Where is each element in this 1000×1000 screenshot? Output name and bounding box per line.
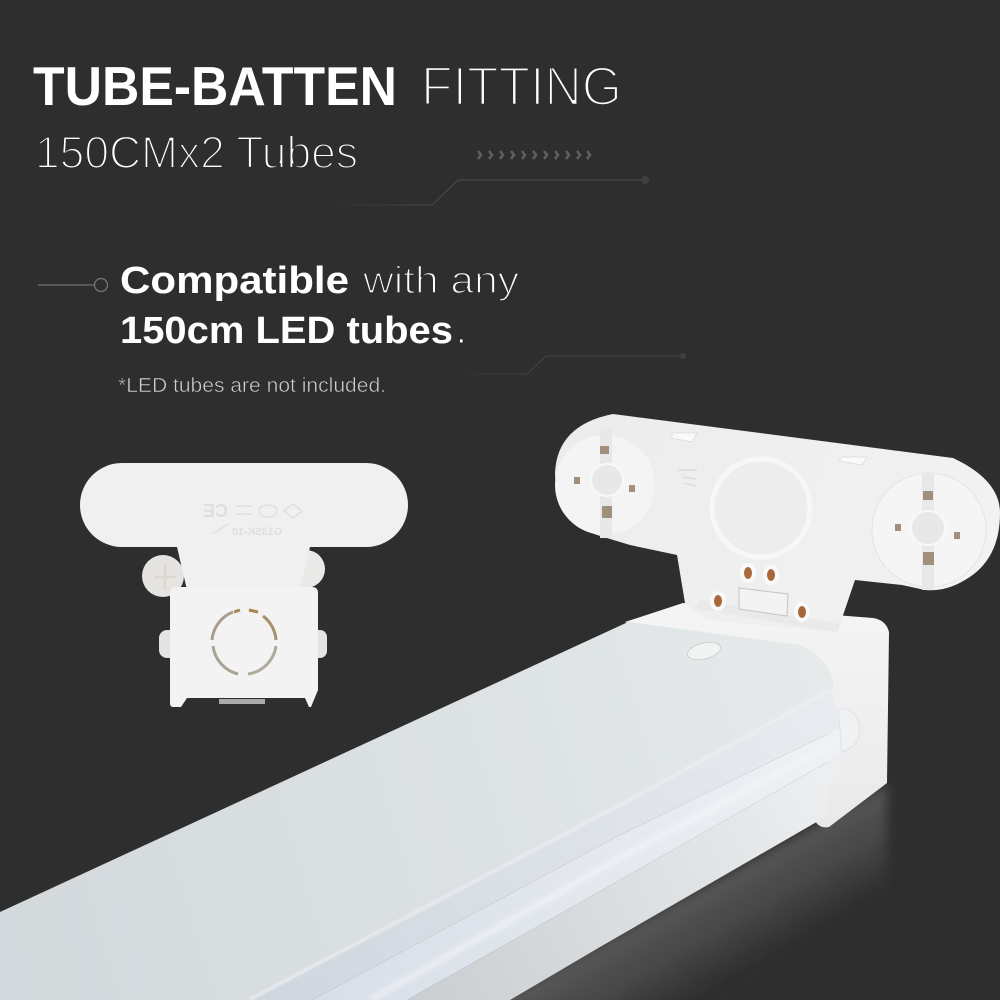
feature text: Compatible (120, 260, 349, 302)
lamp holder (555, 414, 1000, 633)
lower reflector (407, 755, 840, 1000)
moulded mark (678, 470, 697, 486)
circuit line upper (325, 176, 649, 205)
paddle markings: G13SK-10 (232, 526, 282, 538)
batten end cap (625, 603, 889, 827)
side nub left (159, 630, 177, 658)
central round cover (712, 459, 810, 557)
paddle and neck (80, 463, 408, 590)
floor reflection (480, 785, 887, 1000)
right socket slot (922, 473, 934, 590)
footnote: *LED tubes are not included. (118, 375, 386, 397)
right socket contacts (895, 491, 960, 565)
certification marks (212, 504, 302, 534)
right socket bore (911, 511, 945, 545)
paddle markings: CE (203, 501, 228, 521)
paddle markings (203, 501, 282, 538)
title: TUBE-BATTEN (33, 55, 397, 117)
chevron row decoration (478, 151, 590, 159)
wire box (170, 587, 318, 707)
hinge strip (695, 600, 840, 632)
fold highlight (249, 690, 830, 1000)
slot on top face (686, 639, 722, 663)
small end cap view (80, 463, 408, 707)
left socket slot (600, 428, 612, 538)
bottom clip (219, 699, 265, 704)
knockout ring (212, 610, 276, 674)
title (33, 55, 622, 117)
title: FITTING (421, 55, 622, 117)
top tab left (671, 433, 697, 442)
rear lamp disc left (142, 555, 184, 597)
subtitle: 150CMx2 Tubes (35, 127, 358, 178)
left socket bore (591, 464, 623, 496)
right socket disc (872, 473, 986, 587)
batten body (0, 622, 840, 1000)
circuit line lower (450, 353, 686, 374)
bullet connector (38, 278, 108, 292)
side nub right (312, 630, 327, 658)
holder body (555, 414, 1000, 633)
latch window (739, 588, 788, 616)
tube (312, 728, 840, 1000)
top face (0, 622, 834, 1000)
left socket contacts (574, 446, 635, 518)
tube highlight (370, 742, 836, 1000)
feature text (120, 260, 519, 352)
left socket disc (555, 435, 655, 535)
top tab right (839, 457, 867, 465)
feature text: . (456, 310, 467, 352)
feature text: with any (362, 260, 519, 302)
rear lamp disc right (287, 550, 325, 588)
front fold strip (249, 689, 840, 1000)
pin holes (712, 565, 808, 620)
feature text: 150cm LED tubes (120, 310, 453, 352)
end cap tube nub (838, 708, 860, 752)
